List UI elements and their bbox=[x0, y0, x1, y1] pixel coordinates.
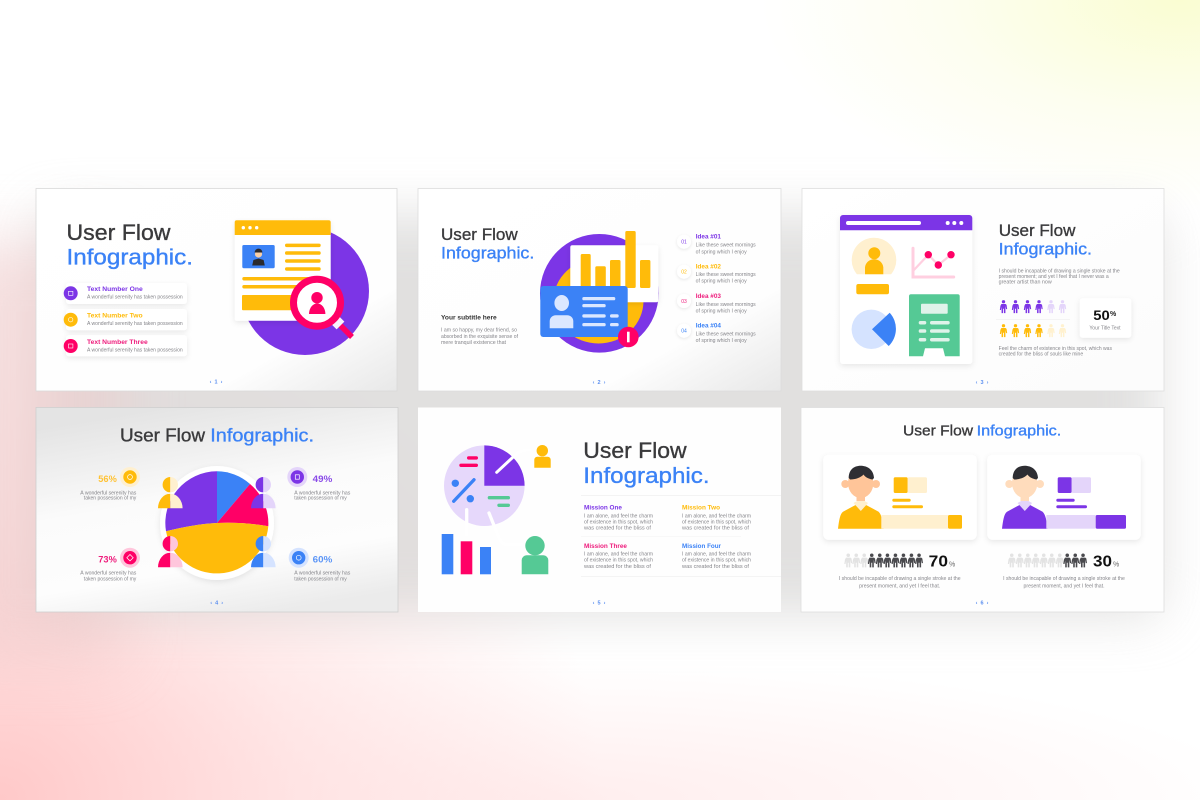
person: blue bbox=[251, 536, 276, 567]
idea 01: of spring which I enjoy bbox=[696, 249, 747, 255]
mission one: of existence in this spot, which bbox=[584, 519, 653, 525]
title: slide 5: User Flow bbox=[583, 438, 687, 463]
title: slide 2: User Flow bbox=[441, 225, 518, 244]
mission one: was created for the bliss of bbox=[584, 526, 652, 532]
illustration: ID card and bar chart bbox=[540, 231, 659, 353]
mission two: Mission Two bbox=[682, 505, 720, 512]
pictogram: people rows bbox=[996, 300, 1070, 337]
mission three: I am alone, and feel the charm bbox=[584, 552, 653, 558]
stat: 49%: A wonderful serenity has bbox=[294, 490, 351, 496]
text block: footer bbox=[999, 346, 1112, 358]
title: slide 4: User Flow bbox=[120, 425, 206, 445]
text block: 70% caption: I should be incapable of drawing a single stroke at the bbox=[839, 576, 961, 582]
stat: 56%: 56% bbox=[98, 474, 117, 485]
stat: 49% bbox=[287, 467, 351, 502]
text block: intro: greater artist than now bbox=[999, 279, 1052, 285]
stat: 60%: 60% bbox=[313, 555, 333, 566]
text block: subtitle: absorbed in the exquisite sense of bbox=[441, 334, 519, 340]
pagination 2: ‹ 2 › bbox=[593, 380, 606, 386]
mission four: Mission Four bbox=[682, 543, 721, 550]
pagination 5: ‹ 5 › bbox=[593, 600, 606, 606]
stat: 56%: A wonderful serenity has bbox=[80, 490, 137, 496]
text block: 30% caption: I should be incapable of drawing a single stroke at the bbox=[1003, 576, 1125, 582]
stat: 73%: A wonderful serenity has bbox=[80, 571, 137, 577]
text block: footer: created for the bliss of souls like mine bbox=[999, 352, 1083, 358]
text block: subtitle bbox=[441, 314, 519, 346]
title: slide 3 bbox=[999, 221, 1092, 258]
mission three: of existence in this spot, which bbox=[584, 558, 653, 564]
text block: intro bbox=[999, 268, 1120, 285]
card: purple profile bbox=[987, 455, 1141, 540]
slide 6 bbox=[801, 408, 1164, 612]
list card: text number three: Text Number Three bbox=[87, 339, 148, 346]
idea 01: Like these sweet mornings bbox=[696, 243, 756, 249]
stat: 30%: % bbox=[1113, 562, 1119, 569]
pie chart bbox=[160, 466, 274, 580]
text block: intro: present moment; and yet I feel that I never was a bbox=[999, 274, 1109, 280]
stat: 30%: 30 bbox=[1093, 554, 1112, 571]
stat: 73%: 73% bbox=[98, 555, 117, 566]
title: slide 5 bbox=[583, 438, 710, 488]
idea 04 bbox=[677, 323, 756, 344]
idea 02: 02 bbox=[681, 270, 687, 276]
text block: subtitle: mere tranquil existence that bbox=[441, 340, 507, 346]
idea 01: 01 bbox=[681, 240, 687, 246]
slide 1 bbox=[36, 188, 397, 391]
pagination 3: ‹ 3 › bbox=[976, 380, 989, 386]
list card: text number two: Text Number Two bbox=[87, 312, 143, 320]
mission one: Mission One bbox=[584, 505, 622, 512]
list card: text number one bbox=[64, 283, 187, 304]
stat: 60%: A wonderful serenity has bbox=[294, 571, 351, 577]
list card: text number three bbox=[64, 335, 187, 356]
stat card: 50% bbox=[1080, 298, 1131, 338]
idea 04: Like these sweet mornings bbox=[696, 332, 756, 338]
pictogram: 30 percent people bbox=[1008, 553, 1087, 567]
title: slide 6 bbox=[903, 423, 1061, 440]
mission one: I am alone, and feel the charm bbox=[584, 513, 653, 519]
stat card: 50%: Your Title Text bbox=[1089, 326, 1121, 332]
text block: footer: Feel the charm of existence in this spot, which was bbox=[999, 346, 1112, 352]
list card: text number one: A wonderful serenity has taken possession bbox=[87, 295, 183, 301]
title: slide 1: Infographic. bbox=[66, 244, 193, 270]
person: yellow bbox=[158, 477, 183, 508]
stat: 60% bbox=[289, 548, 351, 582]
list card: text number three: A wonderful serenity has taken possession bbox=[87, 347, 183, 353]
mission four: was created for the bliss of bbox=[682, 564, 750, 570]
mission two: was created for the bliss of bbox=[682, 526, 750, 532]
idea 02: Like these sweet mornings bbox=[696, 272, 756, 278]
text block: subtitle: I am so happy, my dear friend, so bbox=[441, 327, 517, 333]
slide 3 bbox=[802, 188, 1164, 391]
mission three bbox=[584, 543, 653, 570]
idea 02: Idea #02 bbox=[696, 263, 721, 270]
mission three: was created for the bliss of bbox=[584, 564, 652, 570]
stat: 70%: 70 bbox=[929, 554, 948, 571]
stat: 70% bbox=[929, 554, 955, 571]
idea 03: of spring which I enjoy bbox=[696, 308, 747, 314]
slide 2 bbox=[418, 188, 781, 391]
stat: 70%: % bbox=[949, 562, 955, 569]
pagination 6: ‹ 6 › bbox=[976, 600, 989, 606]
idea 01: Idea #01 bbox=[696, 234, 721, 241]
title: slide 4: Infographic. bbox=[210, 425, 314, 445]
illustration: profile window with magnifier bbox=[235, 220, 369, 355]
stat: 73%: taken possession of my bbox=[84, 576, 137, 582]
pagination 4: ‹ 4 › bbox=[210, 600, 223, 606]
slide 4 bbox=[36, 408, 398, 612]
slide 5 bbox=[418, 408, 781, 612]
illustration: dashboard window bbox=[840, 215, 972, 364]
person: purple bbox=[251, 477, 276, 508]
mission two bbox=[682, 505, 751, 532]
idea 01 bbox=[677, 234, 756, 255]
stat: 30% bbox=[1093, 554, 1119, 571]
text block: 30% caption: present moment, and yet I feel that. bbox=[1024, 583, 1104, 589]
idea 03: Idea #03 bbox=[696, 293, 721, 300]
stat: 49%: taken possession of my bbox=[294, 496, 347, 502]
idea 04: 04 bbox=[681, 329, 687, 335]
title: slide 3: User Flow bbox=[999, 221, 1076, 240]
title: slide 2: Infographic. bbox=[441, 243, 534, 262]
list card: text number two: A wonderful serenity has taken possession bbox=[87, 321, 183, 327]
mission three: Mission Three bbox=[584, 543, 627, 550]
text block: intro: I should be incapable of drawing a single stroke at the bbox=[999, 268, 1120, 274]
idea 04: Idea #04 bbox=[696, 323, 721, 330]
title: slide 4 bbox=[120, 425, 314, 445]
title: slide 1: User Flow bbox=[66, 220, 171, 245]
idea 02 bbox=[677, 263, 756, 284]
stat: 56% bbox=[80, 467, 140, 502]
pagination 1: ‹ 1 › bbox=[210, 380, 223, 386]
title: slide 6: User Flow bbox=[903, 423, 973, 440]
text block: 70% caption: present moment, and yet I feel that. bbox=[859, 583, 940, 589]
idea 03: Like these sweet mornings bbox=[696, 302, 756, 308]
idea 02: of spring which I enjoy bbox=[696, 278, 747, 284]
idea 03 bbox=[677, 293, 756, 314]
pictogram: 70 percent people bbox=[844, 553, 923, 567]
title: slide 5: Infographic. bbox=[583, 463, 710, 488]
text block: subtitle: Your subtitle here bbox=[441, 314, 497, 321]
illustration: pie with people and bars bbox=[442, 445, 551, 574]
mission four: of existence in this spot, which bbox=[682, 558, 751, 564]
stat: 49%: 49% bbox=[313, 474, 333, 485]
mission two: of existence in this spot, which bbox=[682, 519, 751, 525]
idea 03: 03 bbox=[681, 299, 687, 305]
list card: text number one: Text Number One bbox=[87, 286, 143, 293]
title: slide 6: Infographic. bbox=[977, 423, 1061, 440]
text block: 70% caption bbox=[839, 576, 961, 589]
stat card: 50%: 50 bbox=[1093, 307, 1110, 323]
mission two: I am alone, and feel the charm bbox=[682, 513, 751, 519]
mission four bbox=[682, 543, 751, 570]
person: pink bbox=[158, 536, 183, 567]
title: slide 1 bbox=[66, 220, 193, 270]
idea 04: of spring which I enjoy bbox=[696, 338, 747, 344]
card: yellow profile bbox=[823, 455, 977, 540]
mission one bbox=[584, 505, 653, 532]
title: slide 3: Infographic. bbox=[999, 239, 1092, 258]
stat card: 50%: % bbox=[1110, 311, 1117, 318]
stat: 56%: taken possession of my bbox=[84, 496, 137, 502]
text block: 30% caption bbox=[1003, 576, 1125, 589]
list card: text number two bbox=[64, 309, 187, 330]
title: slide 2 bbox=[441, 225, 534, 262]
mission four: I am alone, and feel the charm bbox=[682, 552, 751, 558]
stat: 73% bbox=[80, 548, 140, 582]
stat: 60%: taken possession of my bbox=[294, 576, 347, 582]
